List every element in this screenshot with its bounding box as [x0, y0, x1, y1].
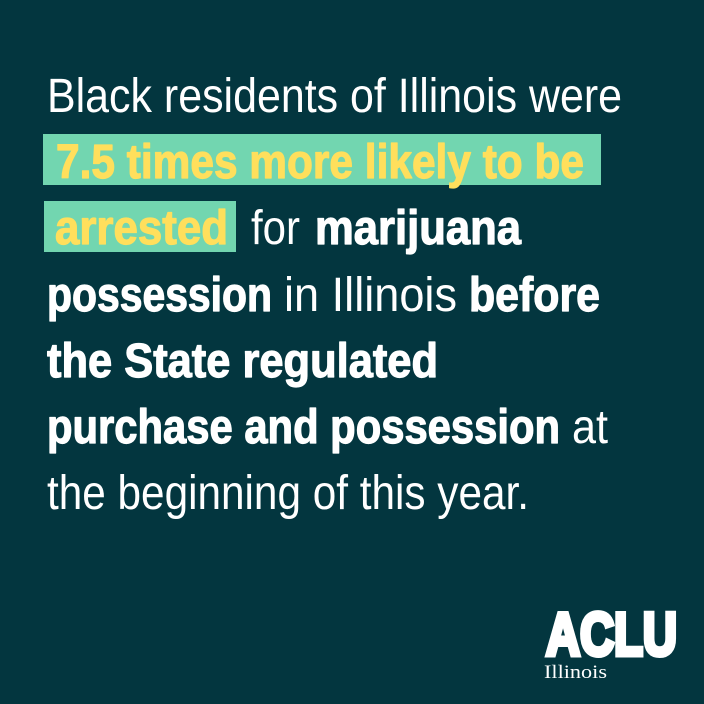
highlight bar 1 — [43, 134, 601, 185]
line 7: the beginning of this year. — [47, 467, 529, 520]
line 3 regular: for — [251, 202, 300, 255]
highlighted text 2: arrested — [55, 202, 228, 255]
statement text block — [43, 70, 622, 520]
highlighted text 1: 7.5 times more likely to be — [56, 136, 584, 189]
line 1: Black residents of Illinois were — [47, 70, 622, 123]
line 5: the State regulated — [47, 335, 438, 388]
ACLU Illinois logo — [544, 601, 677, 683]
highlight bar 2 — [44, 201, 236, 252]
line 6 bold: purchase and possession — [47, 401, 560, 454]
logo subtitle: Illinois — [544, 662, 607, 683]
line 4 bold start: possession — [47, 269, 272, 322]
line 6 regular: at — [572, 401, 608, 454]
line 4 regular: in Illinois — [284, 269, 457, 322]
line 3 bold: marijuana — [315, 202, 521, 255]
line 4 bold end: before — [469, 269, 600, 322]
